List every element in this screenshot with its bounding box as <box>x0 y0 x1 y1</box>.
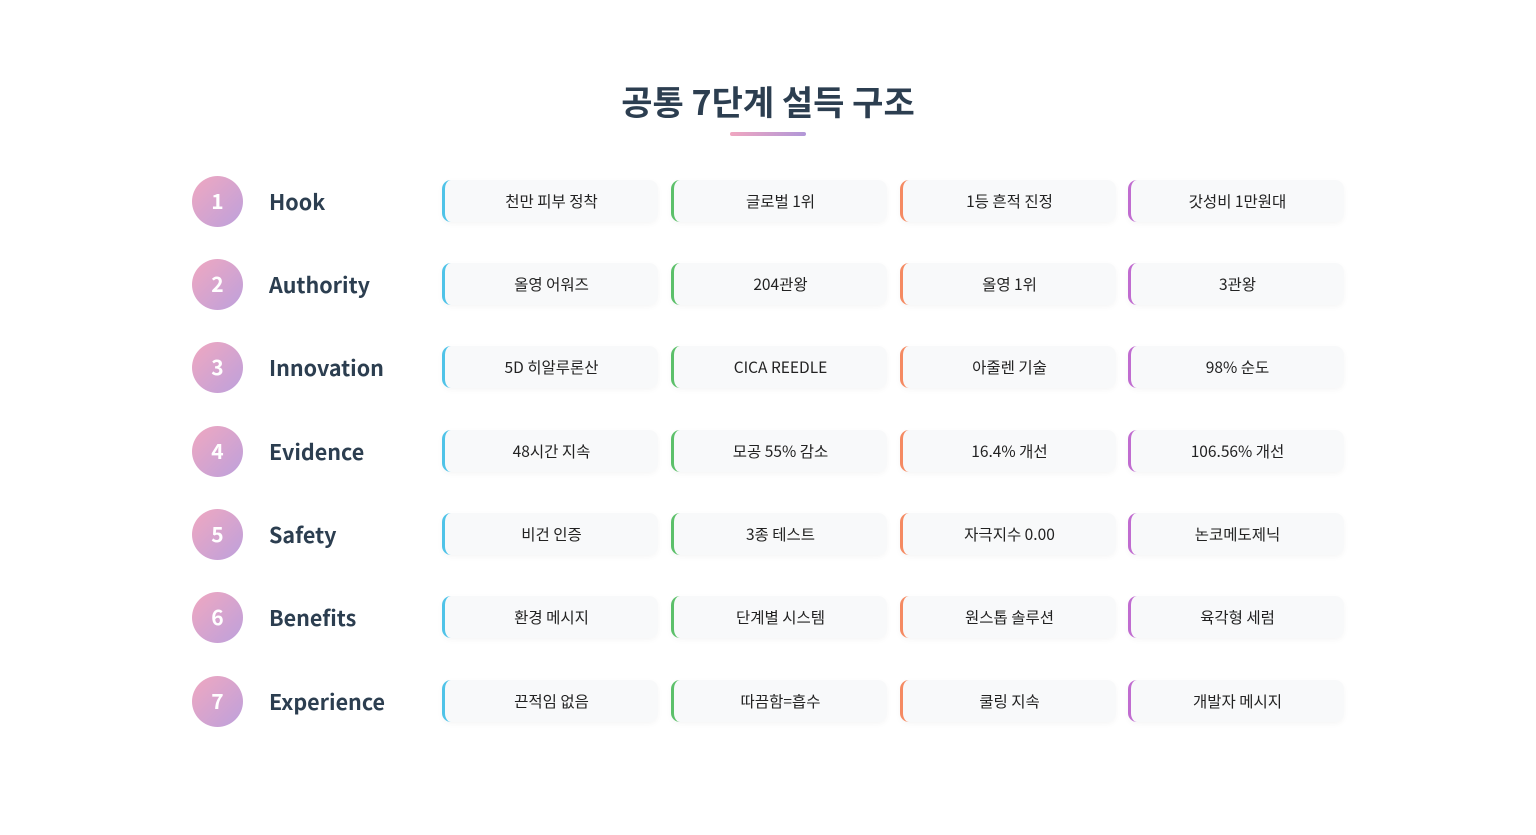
row 1: Hook <box>192 176 1286 227</box>
row 6: Benefits: 6 <box>211 602 224 632</box>
row 3: Innovation: 98% 순도 <box>1206 356 1269 378</box>
row 7: Experience: Experience <box>269 686 385 717</box>
row 4: Evidence: 4 <box>211 436 224 466</box>
row 4: Evidence: 106.56% 개선 <box>1191 440 1284 462</box>
row 5: Safety <box>192 509 1280 560</box>
row 1: Hook: 글로벌 1위 <box>746 190 815 212</box>
row 5: Safety: 비건 인증 <box>521 523 582 545</box>
row 3: Innovation: CICA REEDLE <box>734 356 827 378</box>
row 7: Experience <box>192 676 1282 727</box>
row 4: Evidence: Evidence <box>269 436 364 467</box>
row 2: Authority <box>192 259 1256 310</box>
row 6: Benefits: 육각형 세럼 <box>1200 606 1275 628</box>
row 3: Innovation: 3 <box>211 352 224 382</box>
row 4: Evidence: 모공 55% 감소 <box>733 440 828 462</box>
row 1: Hook: 1등 흔적 진정 <box>966 190 1053 212</box>
title: 공통 7단계 설득 구조 <box>621 76 915 125</box>
row 5: Safety: Safety <box>269 519 336 550</box>
row 4: Evidence: 48시간 지속 <box>513 440 590 462</box>
row 5: Safety: 3종 테스트 <box>746 523 815 545</box>
row 2: Authority: Authority <box>269 269 370 300</box>
row 7: Experience: 개발자 메시지 <box>1193 690 1282 712</box>
row 7: Experience: 따끔함=흡수 <box>741 690 820 712</box>
row 7: Experience: 끈적임 없음 <box>514 690 589 712</box>
row 5: Safety: 5 <box>211 519 224 549</box>
row 6: Benefits: Benefits <box>269 602 356 633</box>
row 7: Experience: 쿨링 지속 <box>979 690 1040 712</box>
row 4: Evidence: 16.4% 개선 <box>971 440 1048 462</box>
row 5: Safety: 자극지수 0.00 <box>964 523 1055 545</box>
row 3: Innovation <box>192 342 1269 393</box>
row 2: Authority: 올영 1위 <box>982 273 1037 295</box>
row 6: Benefits: 환경 메시지 <box>514 606 589 628</box>
row 4: Evidence <box>192 426 1284 477</box>
row 2: Authority: 3관왕 <box>1219 273 1256 295</box>
row 1: Hook: 1 <box>211 186 224 216</box>
row 2: Authority: 2 <box>211 269 224 299</box>
row 2: Authority: 올영 어워즈 <box>514 273 589 295</box>
row 6: Benefits: 단계별 시스템 <box>736 606 825 628</box>
row 7: Experience: 7 <box>211 686 224 716</box>
row 2: Authority: 204관왕 <box>753 273 808 295</box>
row 1: Hook: 갓성비 1만원대 <box>1189 190 1286 212</box>
row 5: Safety: 논코메도제닉 <box>1195 523 1280 545</box>
row 1: Hook: Hook <box>269 186 325 217</box>
row 6: Benefits <box>192 592 1275 643</box>
row 3: Innovation: 5D 히알루론산 <box>504 356 599 378</box>
row 3: Innovation: Innovation <box>269 352 384 383</box>
row 3: Innovation: 아줄렌 기술 <box>972 356 1047 378</box>
row 1: Hook: 천만 피부 정착 <box>505 190 598 212</box>
title underline <box>730 132 806 136</box>
row 6: Benefits: 원스톱 솔루션 <box>965 606 1054 628</box>
